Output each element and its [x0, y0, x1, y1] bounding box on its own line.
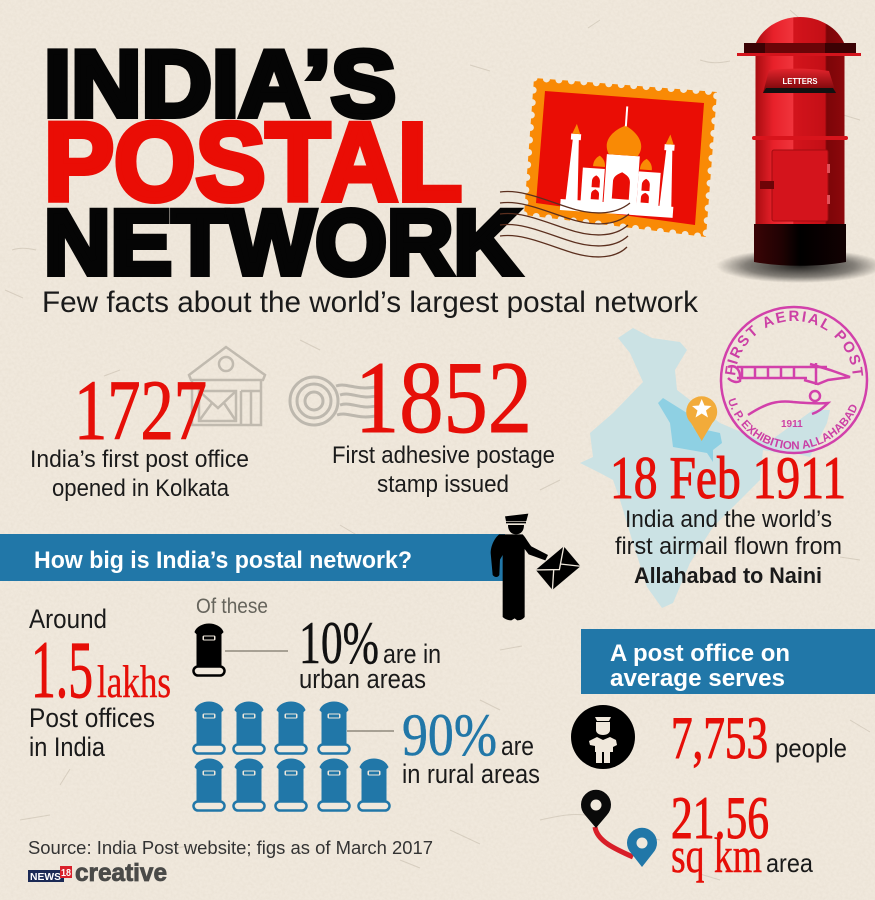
letters plate — [763, 69, 836, 93]
icon: route pins — [581, 790, 657, 867]
stat: 90 percent rural — [347, 702, 540, 789]
postage stamp with Taj Mahal — [524, 78, 717, 237]
stat: 90 percent rural: 90% — [402, 702, 497, 768]
fact: 1852: 1852 — [355, 341, 532, 455]
logo: News18 creative: 18 — [61, 868, 71, 879]
of these label: Of these — [196, 595, 268, 618]
red post box — [716, 17, 875, 283]
title: INDIA’S — [44, 31, 396, 136]
title: NETWORK — [44, 192, 520, 294]
fact: 1852 — [332, 341, 555, 498]
stat: 10 percent urban: 10% — [299, 610, 379, 676]
letters plate: LETTERS — [782, 77, 818, 86]
stat: 1.5 lakhs post offices: in India — [29, 732, 106, 762]
fact: 1852: First adhesive postage — [332, 442, 555, 469]
stat: 21.56 sq km area: 21.56 — [671, 785, 769, 851]
icon: urban post box — [194, 624, 224, 676]
icon: post office house — [189, 347, 265, 425]
fact: 18 Feb 1911: first airmail flown from — [615, 533, 842, 560]
stat: 21.56 sq km area: area — [766, 848, 813, 878]
stat: 21.56 sq km area — [671, 785, 813, 883]
stat: 21.56 sq km area: sq km — [671, 827, 762, 883]
stat: 10 percent urban: urban areas — [299, 664, 426, 694]
stat: 1.5 lakhs post offices: Post offices — [29, 703, 155, 733]
postmark wavy lines — [500, 191, 630, 257]
stat: 1.5 lakhs post offices: 1.5 — [31, 624, 93, 715]
stat: 7,753 people: 7,753 — [671, 705, 768, 771]
icon: postmark circle — [290, 377, 380, 425]
Uttar Pradesh highlight — [658, 398, 722, 462]
fact: 1852: stamp issued — [377, 471, 509, 498]
stat: 10 percent urban: are in — [383, 639, 441, 669]
stat: 90 percent rural: are — [501, 731, 534, 761]
first aerial post postmark: FIRST AERIAL POST — [724, 310, 864, 376]
first aerial post postmark — [720, 306, 868, 454]
stat: 1.5 lakhs post offices: Around — [29, 604, 107, 634]
fact: 1727 — [30, 362, 249, 502]
logo: News18 creative: NEWS — [30, 872, 61, 883]
logo: News18 creative: creative — [75, 859, 167, 887]
Taj Mahal illustration — [560, 102, 680, 218]
fact: 18 Feb 1911: India and the world’s — [625, 506, 832, 533]
location pin with star — [686, 396, 717, 441]
icon: postman with envelope — [491, 514, 581, 620]
heading band: post office serves: A post office on — [610, 640, 790, 667]
icon: postman in circle — [571, 705, 635, 769]
fact: 1727: 1727 — [74, 362, 207, 458]
title — [44, 31, 520, 294]
heading band: post office serves: average serves — [610, 665, 785, 692]
stat: 1.5 lakhs post offices: lakhs — [97, 657, 171, 707]
heading band: how big: How big is India’s postal network? — [34, 547, 412, 574]
stat: 7,753 people: people — [775, 733, 847, 763]
logo: News18 creative — [28, 859, 167, 887]
source: Source: India Post website; figs as of March 2017 — [28, 837, 433, 858]
heading band: post office serves — [581, 629, 875, 694]
stat: 90 percent rural: in rural areas — [402, 759, 540, 789]
biplane — [728, 363, 850, 415]
stat: 1.5 lakhs post offices — [29, 604, 171, 762]
heading band: how big — [0, 534, 505, 581]
India map — [580, 328, 830, 608]
fact: 1727: opened in Kolkata — [52, 475, 230, 502]
fact: 18 Feb 1911: Allahabad to Naini — [634, 563, 822, 588]
subtitle: Few facts about the world’s largest postal network — [42, 286, 699, 319]
first aerial post postmark: 1911 — [781, 419, 803, 430]
stat: 10 percent urban — [225, 610, 441, 694]
title: POSTAL — [44, 101, 462, 224]
icons: rural post boxes — [194, 702, 390, 810]
fact: 18 Feb 1911 — [610, 445, 846, 588]
first aerial post postmark: U. P. EXHIBITION ALLAHABAD — [728, 398, 856, 450]
fact: 1727: India’s first post office — [30, 446, 249, 473]
